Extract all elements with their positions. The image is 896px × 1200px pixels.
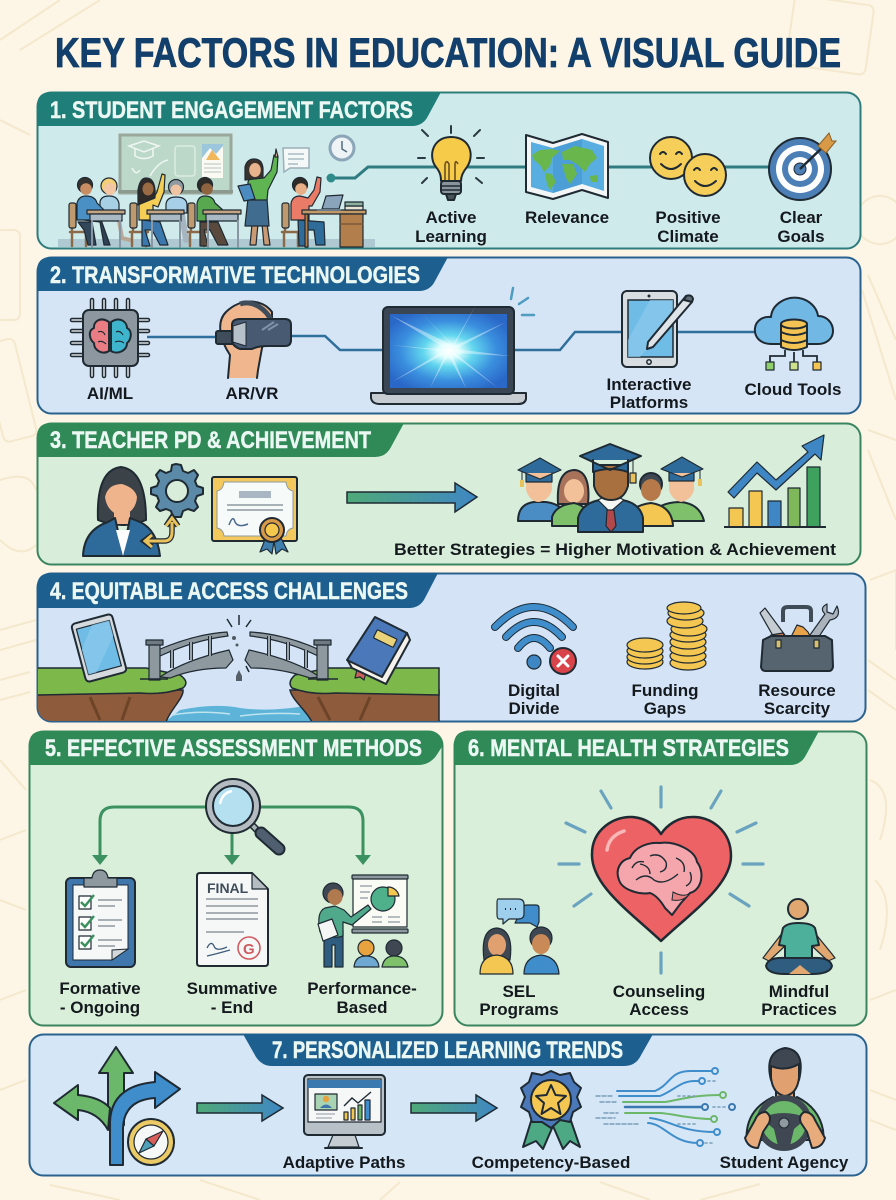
desk 3	[203, 210, 241, 247]
icon: world map	[526, 134, 608, 199]
illustration: data streams	[596, 1068, 735, 1146]
icon: teacher with gear	[83, 464, 203, 556]
icon: certificate	[212, 477, 297, 554]
label: Summative - End: Summative	[187, 979, 277, 998]
icon: monitor dashboard	[304, 1075, 385, 1148]
student 3	[130, 174, 168, 246]
panel: equitable access challenges	[37, 573, 866, 722]
desk 2	[147, 210, 184, 247]
connector line	[331, 167, 770, 178]
back row students	[100, 178, 187, 240]
icon: graduating students	[518, 444, 704, 532]
icon: tablet and stylus	[622, 291, 693, 367]
label: AR/VR: AR/VR	[226, 384, 278, 403]
label: SEL Programs: SEL	[502, 982, 536, 1001]
icon: tablet	[71, 614, 127, 682]
label: Relevance: Relevance	[525, 208, 609, 227]
desk 1	[87, 210, 125, 247]
header: section 2: 2. TRANSFORMATIVE TECHNOLOGIES	[50, 262, 420, 289]
label: AI/ML: AI/ML	[87, 384, 133, 403]
label: Formative - Ongoing: Formative	[59, 979, 141, 998]
label: Funding Gaps: Gaps	[644, 699, 686, 718]
icon: presenter with chart	[318, 875, 408, 967]
arrow: teacher growth to students	[347, 483, 477, 512]
label: Funding Gaps: Funding	[631, 681, 699, 700]
header: section 3: 3. TEACHER PD & ACHIEVEMENT	[50, 427, 371, 454]
label: Active Learning: Learning	[415, 227, 487, 246]
label: Positive Climate: Climate	[657, 227, 719, 246]
header: section 7	[243, 1034, 653, 1066]
student 1	[69, 178, 110, 246]
label: Mindful Practices: Practices	[761, 1000, 837, 1019]
header: section 4	[37, 573, 438, 608]
label: Digital Divide: Divide	[508, 699, 560, 718]
label: Performance-Based: Performance-	[307, 979, 417, 998]
panel: personalized learning trends	[30, 1034, 866, 1176]
arrow: adaptive to competency	[411, 1095, 497, 1121]
icon: diverging path arrows	[54, 1047, 180, 1165]
illustration: classroom	[58, 135, 375, 247]
icon: final exam document	[197, 873, 268, 966]
label: Clear Goals: Goals	[777, 227, 825, 246]
icon: heart with brain	[592, 817, 731, 941]
header: section 4: 4. EQUITABLE ACCESS CHALLENGES	[50, 578, 408, 605]
header: section 1: 1. STUDENT ENGAGEMENT FACTORS	[50, 97, 413, 124]
label: Counseling Access: Counseling	[613, 982, 705, 1001]
chart: rising bars with trend arrow	[724, 435, 826, 527]
connector line	[147, 332, 755, 350]
label: Clear Goals: Clear	[780, 208, 823, 227]
panel: mental health strategies	[454, 731, 866, 1026]
icon: lightbulb	[418, 126, 484, 200]
icon: final exam document: FINAL	[207, 880, 249, 896]
header: section 6: 6. MENTAL HEALTH STRATEGIES	[468, 735, 789, 762]
icon: meditating person	[763, 899, 835, 974]
label: Interactive Platforms: Platforms	[610, 393, 688, 412]
icon: glowing laptop	[371, 288, 534, 404]
label: Positive Climate: Positive	[655, 208, 721, 227]
panel: teacher PD and achievement	[37, 423, 860, 564]
student 5	[188, 178, 228, 246]
label: Cloud Tools: Cloud Tools	[745, 380, 841, 399]
header: section 5	[29, 731, 443, 765]
label: Performance-Based: Based	[336, 998, 388, 1017]
panel: transformative technologies	[37, 257, 860, 414]
panel: effective assessment methods	[29, 731, 443, 1026]
teacher	[238, 149, 278, 245]
icon: student driving	[745, 1048, 825, 1148]
label: SEL Programs: Programs	[479, 1000, 559, 1019]
icon: target with arrow	[769, 133, 836, 200]
icon: competency medal	[521, 1071, 581, 1149]
label: Resource Scarcity: Resource	[758, 681, 836, 700]
student 6 and teacher desk	[282, 177, 366, 247]
icon: final exam document: G	[243, 941, 255, 958]
label: Counseling Access: Access	[629, 1000, 689, 1019]
caption: strategies to achievement: Better Strategies = Higher Motivation & Achievement	[394, 540, 836, 559]
label: Summative - End: - End	[211, 998, 253, 1017]
icon: book	[347, 617, 410, 684]
icon: two people talking	[480, 899, 559, 974]
student center	[578, 444, 643, 532]
student right	[655, 457, 704, 521]
label: Active Learning: Active	[425, 208, 477, 227]
icon: magnifying glass	[206, 779, 279, 849]
illustration: broken bridge across river	[37, 615, 439, 722]
label: Student Agency: Student Agency	[720, 1153, 849, 1172]
label: Digital Divide: Digital	[508, 681, 560, 700]
icon: cloud database	[755, 298, 833, 370]
header: section 7: 7. PERSONALIZED LEARNING TRENDS	[272, 1037, 623, 1064]
connector arrows	[92, 807, 371, 865]
icon: coin stacks	[627, 602, 707, 670]
icon: wifi with x	[495, 607, 576, 674]
label: Adaptive Paths: Adaptive Paths	[283, 1153, 405, 1172]
rays around heart	[559, 787, 763, 973]
label: Mindful Practices: Mindful	[769, 982, 829, 1001]
header: section 5: 5. EFFECTIVE ASSESSMENT METHODS	[45, 735, 422, 762]
arrow: paths to adaptive	[197, 1095, 283, 1121]
icon: AI chip with brain	[72, 300, 148, 376]
icon: smiling faces	[650, 137, 726, 196]
student boy	[628, 473, 673, 526]
student left	[518, 458, 564, 521]
label: Competency-Based: Competency-Based	[472, 1153, 630, 1172]
label: Interactive Platforms: Interactive	[606, 375, 692, 394]
icon: clipboard checklist	[66, 870, 135, 967]
student girl	[552, 470, 592, 526]
icon: VR headset on head	[216, 302, 291, 378]
panel: student engagement factors	[37, 92, 860, 248]
label: Resource Scarcity: Scarcity	[764, 699, 831, 718]
label: Formative - Ongoing: - Ongoing	[60, 998, 140, 1017]
icon: toolbox	[760, 604, 838, 671]
